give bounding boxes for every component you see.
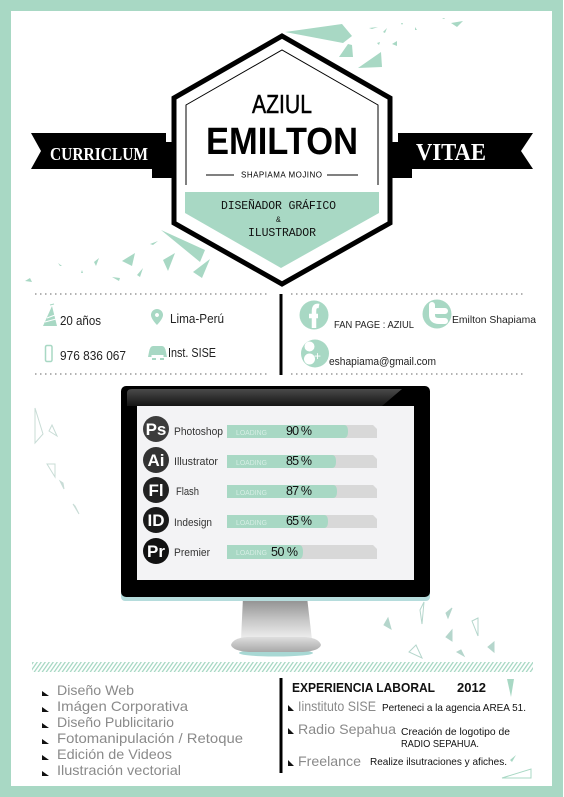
icon: building bbox=[148, 346, 167, 360]
skill row: Indesign: 65 % bbox=[286, 514, 312, 528]
experience panel bbox=[288, 680, 526, 769]
skill row: Indesign bbox=[143, 507, 377, 533]
icon: party hat bbox=[43, 304, 57, 326]
icon: twitter bbox=[422, 300, 452, 328]
skill row: Illustrator: LOADING bbox=[236, 460, 267, 467]
icon: google plus: + bbox=[314, 349, 321, 363]
list item: Diseño Web bbox=[57, 682, 134, 698]
skill row: Flash: LOADING bbox=[236, 490, 267, 497]
mint role panel bbox=[185, 192, 379, 268]
skill row: Illustrator: Illustrator bbox=[174, 456, 218, 468]
ribbon left: CURRICLUM bbox=[31, 133, 174, 178]
decorative shards: top right bbox=[285, 18, 463, 68]
location: Lima-Perú bbox=[170, 311, 224, 326]
skill row: Premier: LOADING bbox=[236, 550, 267, 557]
skill row: Photoshop: LOADING bbox=[236, 430, 267, 437]
skill row: Photoshop: Ps bbox=[146, 420, 166, 439]
personal info bbox=[43, 304, 224, 363]
skill row: Illustrator bbox=[143, 447, 377, 473]
list item: Fotomanipulación / Retoque bbox=[57, 730, 243, 746]
ribbon left: CURRICLUM: CURRICLUM bbox=[50, 144, 148, 164]
job: Radio Sepahua: Creación de logotipo de bbox=[401, 726, 510, 738]
job: Freelance bbox=[288, 753, 507, 769]
mint role panel: ILUSTRADOR bbox=[248, 227, 316, 240]
job: Instituto SISE: Perteneci a la agencia AREA 51. bbox=[382, 702, 526, 714]
skill row: Flash: Flash bbox=[176, 486, 199, 498]
experience heading: EXPERIENCIA LABORAL bbox=[292, 680, 435, 695]
icon: google plus bbox=[301, 340, 329, 368]
skill row: Indesign: ID bbox=[148, 511, 164, 530]
skill row: Premier: Pr bbox=[147, 542, 165, 561]
school: Inst. SISE bbox=[168, 345, 216, 360]
monitor bbox=[121, 386, 430, 656]
skill row: Photoshop: 90 % bbox=[286, 424, 312, 438]
social links bbox=[300, 300, 536, 368]
phone number: 976 836 067 bbox=[60, 348, 126, 363]
decorative shards: bottom left bbox=[25, 230, 210, 282]
skill row: Flash: Fl bbox=[148, 481, 164, 500]
job: Radio Sepahua: Radio Sepahua bbox=[298, 721, 396, 737]
title: EMILTON: EMILTON bbox=[206, 121, 358, 163]
job: Instituto SISE: Iinstituto SISE bbox=[298, 698, 376, 714]
skill row: Indesign: Indesign bbox=[174, 517, 212, 529]
job: Freelance: Freelance bbox=[298, 753, 361, 769]
title: AZIUL: AZIUL bbox=[252, 89, 312, 119]
age: 20 años bbox=[60, 313, 101, 328]
fan page: FAN PAGE : AZIUL bbox=[334, 319, 414, 331]
monitor stand bbox=[231, 597, 321, 656]
skill row: Premier bbox=[143, 538, 377, 564]
skill row: Premier: 50 % bbox=[271, 545, 298, 559]
experience divider bbox=[280, 678, 282, 773]
monitor bezel bbox=[121, 386, 430, 597]
icon: facebook bbox=[300, 300, 328, 330]
decorative shards: left of monitor bbox=[35, 408, 79, 514]
skill row: Illustrator: Ai bbox=[148, 451, 164, 470]
job: Radio Sepahua: RADIO SEPAHUA. bbox=[401, 738, 479, 750]
list item: Ilustración vectorial bbox=[57, 762, 181, 778]
job: Instituto SISE bbox=[288, 698, 526, 714]
list item: Diseño Publicitario bbox=[57, 714, 174, 730]
skill row: Flash bbox=[143, 477, 377, 503]
decorative shards: bottom right bbox=[502, 679, 531, 778]
mint role panel: DISEÑADOR GRÁFICO bbox=[221, 199, 336, 213]
skill row: Indesign: LOADING bbox=[236, 520, 267, 527]
mint role panel: & bbox=[276, 216, 281, 225]
dotted dividers and centre line bbox=[35, 294, 526, 375]
icon: phone bbox=[46, 346, 52, 362]
list item: Edición de Videos bbox=[57, 746, 172, 762]
ribbon right: VITAE bbox=[390, 133, 533, 178]
hexagon badge bbox=[174, 36, 390, 284]
icon: location pin bbox=[151, 309, 163, 325]
skills list bbox=[42, 682, 243, 778]
monitor screen bbox=[137, 406, 414, 580]
skill row: Photoshop: Photoshop bbox=[174, 426, 223, 438]
job: Freelance: Realize ilsutraciones y afiches. bbox=[370, 756, 507, 768]
skill row: Illustrator: 85 % bbox=[286, 454, 312, 468]
email: eshapiama@gmail.com bbox=[329, 356, 436, 368]
monitor shadow bbox=[121, 590, 430, 601]
skill row: Flash: 87 % bbox=[286, 484, 312, 498]
ribbon right: VITAE: VITAE bbox=[416, 140, 486, 166]
job: Radio Sepahua bbox=[288, 721, 510, 750]
list item: Imágen Corporativa bbox=[57, 698, 188, 714]
experience year: 2012 bbox=[457, 680, 486, 695]
skill row: Photoshop bbox=[143, 416, 377, 442]
hatched band bbox=[32, 662, 533, 672]
decorative shards: right of monitor bbox=[384, 602, 494, 658]
subtitle: Shapiama Mojino: SHAPIAMA MOJINO bbox=[241, 170, 322, 180]
twitter name: Emilton Shapiama bbox=[452, 314, 536, 326]
skill row: Premier: Premier bbox=[174, 547, 210, 559]
